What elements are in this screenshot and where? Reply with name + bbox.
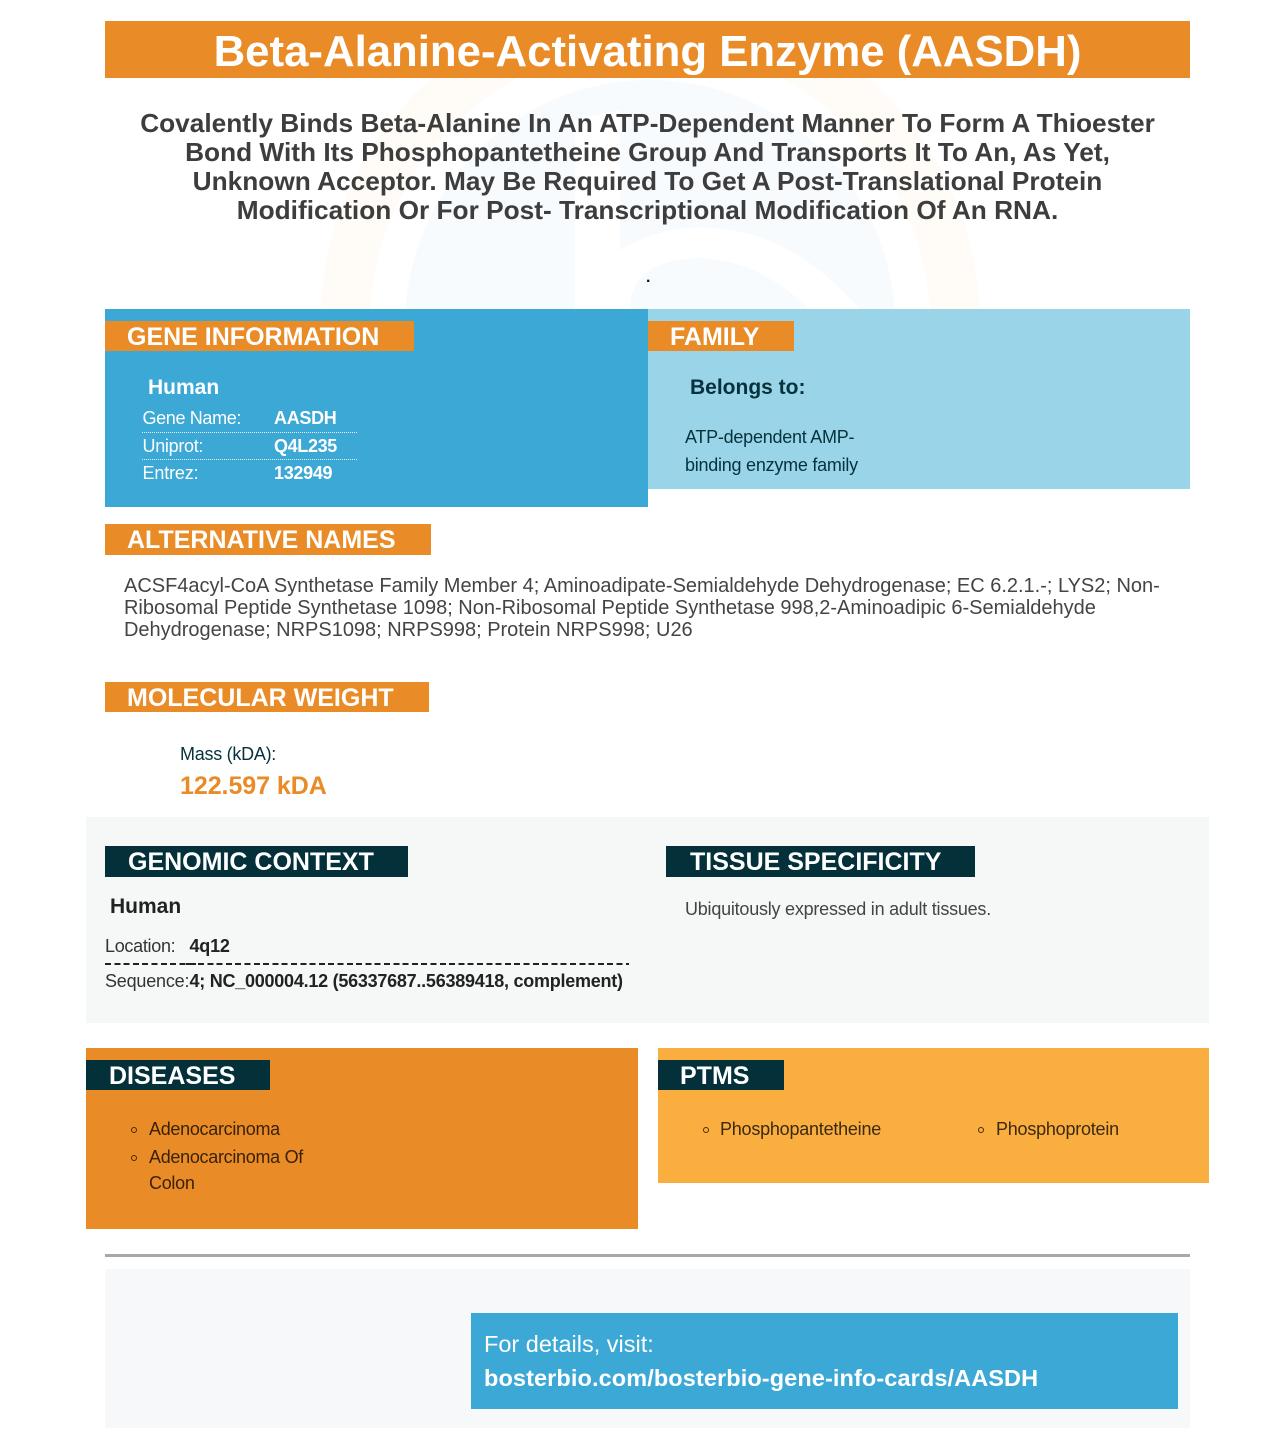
- heading: diseases: DISEASES: [109, 1062, 235, 1090]
- alternative names text: [124, 575, 1160, 641]
- heading: family: [648, 321, 794, 351]
- family text: ATP-dependent AMP-: [685, 427, 854, 447]
- mass block: [180, 744, 327, 800]
- gene info rows: Gene Name:: [142, 408, 241, 428]
- location row: Location:: [105, 936, 175, 956]
- panel: genomic context and tissue specificity: [86, 817, 1209, 1023]
- gene info rows: 132949: [274, 463, 332, 483]
- species label: Human: [148, 376, 219, 399]
- heading: tissue specificity: TISSUE SPECIFICITY: [690, 848, 941, 876]
- panel: footer: [105, 1269, 1190, 1428]
- location value: 4q12: [190, 936, 230, 956]
- heading: diseases: [86, 1060, 270, 1090]
- subtitle description: Bond With Its Phosphopantetheine Group And Transports It To An, As Yet,: [185, 137, 1110, 167]
- diseases list: Adenocarcinoma: [149, 1119, 280, 1139]
- sequence value: 4; NC_000004.12 (56337687..56389418, complement): [190, 971, 623, 991]
- title banner: Beta-Alanine-Activating Enzyme (AASDH): [214, 27, 1081, 76]
- ptms list: [703, 1119, 1119, 1139]
- tissue specificity text: Ubiquitously expressed in adult tissues.: [685, 899, 991, 919]
- subtitle description: Covalently Binds Beta-Alanine In An ATP-Dependent Manner To Form A Thioester: [140, 108, 1155, 138]
- belongs to label: Belongs to:: [690, 376, 806, 399]
- alternative names text: Ribosomal Peptide Synthetase 1098; Non-Ribosomal Peptide Synthetase 998,2-Aminoadipic 6-Semialdehyde: [124, 597, 1096, 619]
- heading: molecular weight: MOLECULAR WEIGHT: [127, 684, 394, 712]
- alternative names text: ACSF4acyl-CoA Synthetase Family Member 4; Aminoadipate-Semialdehyde Dehydrogenase; EC 6.2.1.-; LYS2; Non-: [124, 575, 1160, 597]
- ptms list: Phosphopantetheine: [720, 1119, 881, 1139]
- diseases list: Adenocarcinoma Of: [149, 1147, 303, 1167]
- panel: family: [648, 309, 1190, 489]
- species label: Human: [110, 895, 181, 918]
- ptms list: Phosphoprotein: [996, 1119, 1119, 1139]
- mass label: Mass (kDA):: [180, 744, 276, 764]
- heading: ptms: [658, 1060, 784, 1090]
- dot text: .: [646, 269, 650, 286]
- subtitle description: [140, 108, 1155, 225]
- family text: [685, 427, 858, 475]
- gene info rows: AASDH: [274, 408, 337, 428]
- heading: genomic context: GENOMIC CONTEXT: [128, 848, 374, 876]
- mass value: 122.597 kDA: [180, 772, 327, 800]
- panel: ptms: [658, 1048, 1209, 1183]
- visit label: For details, visit:: [484, 1331, 654, 1357]
- watermark logo: [300, 70, 1000, 310]
- subtitle description: Modification Or For Post- Transcriptional Modification Of An RNA.: [237, 195, 1058, 225]
- gene info rows: Entrez:: [142, 463, 198, 483]
- title banner: [105, 21, 1190, 78]
- panel: diseases: [86, 1048, 638, 1229]
- diseases list: [131, 1119, 304, 1193]
- visit url: bosterbio.com/bosterbio-gene-info-cards/AASDH: [484, 1365, 1038, 1391]
- heading: gene information: GENE INFORMATION: [127, 323, 379, 351]
- heading: ptms: PTMS: [680, 1062, 749, 1090]
- subtitle description: Unknown Acceptor. May Be Required To Get A Post-Translational Protein: [193, 166, 1102, 196]
- heading: alternative names: ALTERNATIVE NAMES: [127, 526, 396, 554]
- panel: gene information: [105, 309, 648, 507]
- gene info rows: [142, 408, 357, 483]
- heading: family: FAMILY: [670, 323, 759, 351]
- alternative names text: Dehydrogenase; NRPS1098; NRPS998; Protein NRPS998; U26: [124, 619, 693, 641]
- callout: visit details: [471, 1313, 1178, 1409]
- diseases list: Colon: [149, 1173, 195, 1193]
- family text: binding enzyme family: [685, 455, 858, 475]
- gene info rows: Q4L235: [274, 436, 337, 456]
- gene info rows: Uniprot:: [142, 436, 203, 456]
- sequence row: Sequence:: [105, 971, 189, 991]
